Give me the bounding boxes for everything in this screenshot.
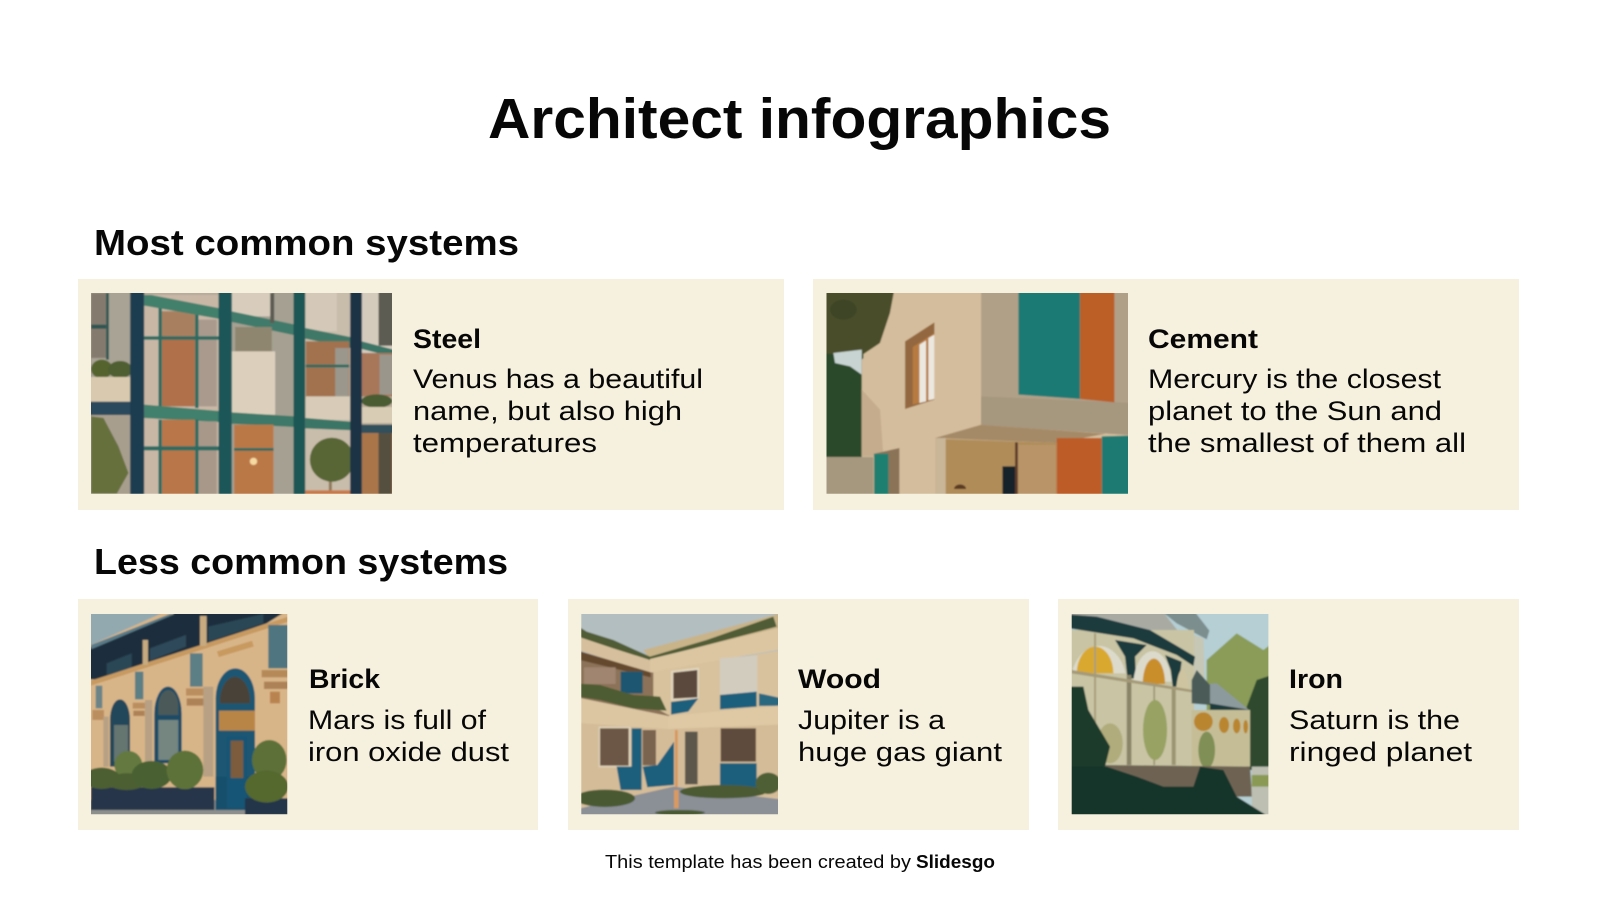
description: cement: planet to the Sun and	[1148, 396, 1442, 426]
description: steel: Venus has a beautiful	[413, 364, 703, 394]
footer credit: Slidesgo	[916, 851, 995, 872]
heading: most common systems: Most common systems	[94, 222, 519, 263]
description: iron: Saturn is the	[1289, 705, 1460, 735]
description: steel: temperatures	[413, 428, 597, 458]
label: steel: Steel	[413, 324, 481, 354]
description: steel: name, but also high	[413, 396, 682, 426]
description: brick	[308, 705, 510, 767]
description: iron: ringed planet	[1289, 737, 1473, 767]
panel: steel	[78, 279, 784, 510]
image: wood building	[581, 614, 778, 814]
description: brick: iron oxide dust	[308, 737, 510, 767]
image: cement house	[826, 293, 1128, 494]
description: steel	[413, 364, 703, 458]
panel: wood	[568, 599, 1029, 830]
image: iron greenhouse	[1072, 614, 1268, 814]
description: cement: the smallest of them all	[1148, 428, 1466, 458]
description: iron	[1289, 705, 1473, 767]
heading: less common systems: Less common systems	[94, 541, 508, 582]
description: cement	[1148, 364, 1466, 458]
label: wood: Wood	[798, 664, 881, 694]
image: steel building facade	[91, 293, 392, 494]
panel: brick	[78, 599, 538, 830]
title: Architect infographics	[488, 87, 1111, 151]
description: wood: Jupiter is a	[798, 705, 946, 735]
description: cement: Mercury is the closest	[1148, 364, 1442, 394]
label: iron: Iron	[1289, 664, 1343, 694]
image: brick building	[91, 614, 288, 814]
footer credit: This template has been created by	[605, 851, 912, 872]
label: brick: Brick	[309, 664, 381, 694]
description: wood	[798, 705, 1003, 767]
panel: cement	[813, 279, 1519, 510]
description: brick: Mars is full of	[308, 705, 487, 735]
label: cement: Cement	[1148, 324, 1258, 354]
panel: iron	[1058, 599, 1519, 830]
description: wood: huge gas giant	[798, 737, 1003, 767]
